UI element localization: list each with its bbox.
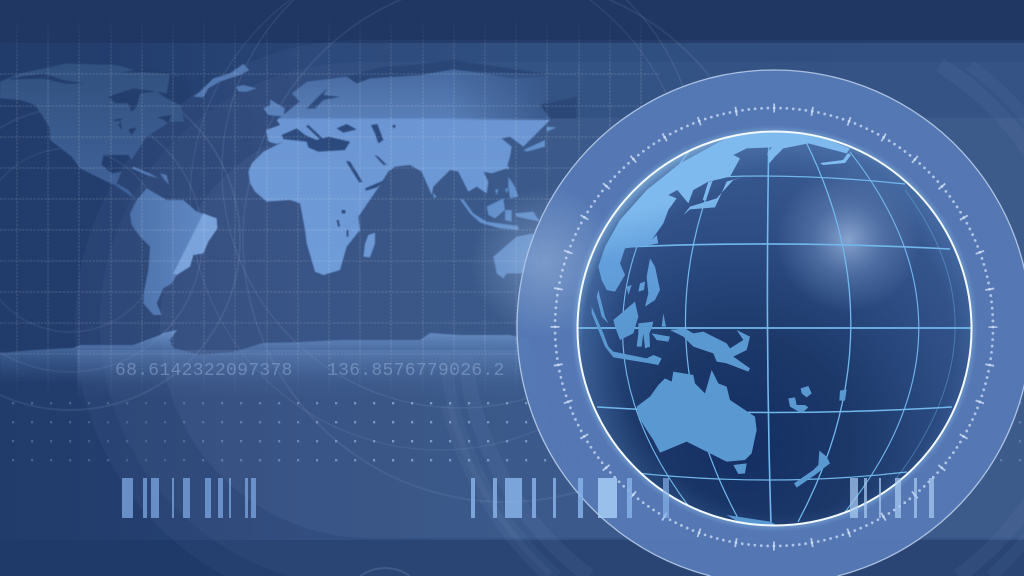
New Zealand [794, 451, 830, 488]
Asian islands [433, 127, 557, 230]
readout: latitude: 136.8576779026.2 [327, 361, 505, 381]
South America lit segment [173, 213, 217, 275]
map: Eurasia and Africa [248, 60, 577, 278]
Philippines [645, 258, 660, 307]
Antarctic edge [726, 515, 776, 524]
North America [0, 63, 187, 198]
Greenland coast, Iceland and Caribbean [132, 64, 257, 185]
globe graticule [577, 132, 972, 525]
ring dotted scale [555, 108, 993, 546]
Pacific islands [801, 386, 812, 397]
globe [576, 127, 972, 528]
globe limb light [578, 132, 972, 526]
globe highlight [776, 168, 920, 312]
curved ribbons around the globe [445, 65, 1024, 576]
world map [0, 60, 577, 385]
coordinate readouts [115, 361, 505, 381]
map grid [0, 20, 660, 400]
Britain [263, 99, 285, 116]
readout: longitude: 68.6142322097378 [115, 361, 293, 381]
East Asia [598, 132, 850, 292]
Tasmania [733, 463, 747, 474]
globe glow [576, 130, 972, 526]
Hudson Bay and Arctic waters [10, 66, 192, 135]
ring around the globe [470, 70, 1024, 576]
Japan arc [683, 177, 743, 215]
South America [130, 188, 217, 315]
Arctic shadow [347, 60, 553, 84]
horizon glow [77, 350, 537, 400]
ring tick marks [555, 108, 993, 546]
Australia [637, 370, 757, 462]
Malay peninsula [597, 290, 608, 323]
barcode centre [471, 478, 669, 518]
Borneo [613, 302, 638, 340]
Antarctica [0, 330, 530, 385]
globe sphere [578, 132, 972, 526]
Far East shadow [540, 97, 577, 118]
barcode right [850, 478, 934, 518]
globe land [577, 127, 851, 528]
inland seas [282, 88, 395, 237]
Alaska [820, 153, 851, 165]
Madagascar [363, 233, 375, 257]
dot matrix [0, 400, 1024, 465]
globe rim [578, 132, 972, 526]
thin radar circles [0, 0, 767, 576]
ring cloud haze [470, 187, 620, 337]
Sumatra and Java [592, 307, 662, 365]
barcode left [122, 478, 256, 518]
map: Americas [0, 63, 257, 315]
Sulawesi [637, 322, 653, 348]
Australia [493, 233, 540, 278]
Kuril ridge [703, 182, 712, 201]
Eurasia and Africa landmass [248, 69, 550, 275]
New Guinea [670, 328, 750, 372]
